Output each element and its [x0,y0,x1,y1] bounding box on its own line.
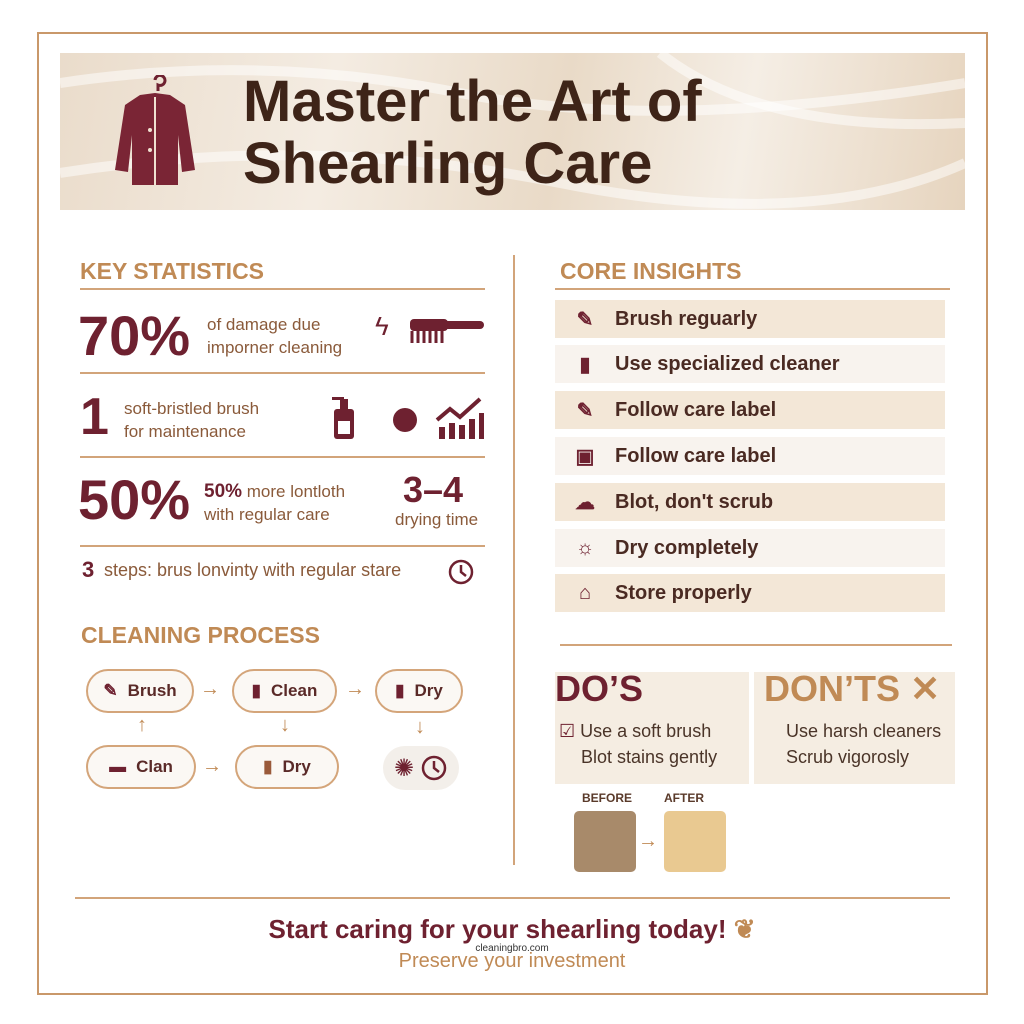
panel: donts [754,672,955,784]
heading: cleaning process: CLEANING PROCESS [81,622,320,648]
panel: donts: Use harsh cleaners [786,721,941,741]
footer: cleaningbro.com [475,943,549,954]
text: Follow care label [615,444,776,466]
footer [268,914,756,972]
panel: dos: ☑ Use a soft brush [559,721,711,741]
flowchart: cleaning process: Dry [282,757,311,776]
stat 50%: 3–4 [403,469,463,510]
text: ⌂ [579,582,591,604]
panel: dos [555,672,749,784]
text: ▣ [576,446,594,468]
text: Dry completely [615,536,758,558]
panel: key statistics [78,258,485,584]
flowchart: cleaning process: Dry [414,681,443,700]
stat 70%: of damage due [207,315,320,334]
stat 1 brush: soft-bristled brush [124,399,259,418]
stat 3 steps: steps: brus lonvinty with regular stare [104,560,401,580]
panel: dos: DO’S [555,668,643,709]
footer: Start caring for your shearling today! ❦ [268,914,756,944]
insight rows: Brush reguarly [615,308,757,330]
flowchart: cleaning process: Clean [271,681,317,700]
text: ▮ [579,354,590,376]
text: Store properly [615,582,752,604]
text: Blot, don't scrub [615,490,773,512]
flowchart: cleaning process: → [345,678,365,700]
before/after: AFTER [664,791,704,805]
flowchart: cleaning process [86,669,463,790]
stat 70%: 70% [78,304,190,367]
before/after: BEFORE [582,791,632,805]
flowchart: cleaning process: ↑ [137,714,147,736]
stat 1 brush [80,388,484,446]
stat 70%: imporner cleaning [207,338,342,357]
title: Master the Art of [243,69,702,134]
flowchart: cleaning process: ↓ [280,714,290,736]
stat 50%: 50% [78,468,190,531]
before/after [574,791,726,872]
stat 70%: ϟ [375,311,389,341]
stat 70% [78,304,484,367]
flowchart: cleaning process: Clan [136,757,173,776]
flowchart: cleaning process: ▮ [252,681,261,700]
panel: donts: DON’TS ✕ [764,668,940,709]
stat 1 brush: 1 [80,388,109,446]
stat 50%: drying time [395,510,478,529]
divider [513,255,515,865]
title: Shearling Care [243,131,652,196]
panel: core insights: CORE INSIGHTS [560,258,741,284]
flowchart: cleaning process: ✺ [394,754,414,782]
stat 50%: 50% more lontloth [204,481,345,502]
stat 1 brush: for maintenance [124,422,246,441]
flowchart: cleaning process: ▮ [263,757,272,776]
text: ☁ [575,492,595,514]
stat 50% [78,468,478,531]
text: Use specialized cleaner [615,352,840,374]
before/after: → [638,830,658,852]
insight rows: ✎ [577,308,593,330]
text: Follow care label [615,398,776,420]
insight rows [555,300,945,338]
panel: dos: Blot stains gently [581,747,717,767]
flowchart: cleaning process: ✎ [103,681,118,700]
header banner [60,53,965,210]
flowchart: cleaning process: ↓ [415,716,425,738]
footer: Preserve your investment [399,950,625,972]
flowchart: cleaning process: → [202,755,222,777]
panel: donts: Scrub vigorosly [786,747,909,767]
flowchart: cleaning process: → [200,678,220,700]
icon: coat [115,75,195,185]
stat 50%: with regular care [204,505,330,524]
flowchart: cleaning process: Brush [128,681,177,700]
stat 3 steps: 3 [82,557,94,582]
text: ☼ [576,536,594,558]
text: ✎ [577,400,593,422]
panel: key statistics: KEY STATISTICS [80,258,264,284]
flowchart: cleaning process: ▮ [395,681,404,700]
title [243,69,702,196]
stat 3 steps [82,557,474,584]
flowchart: cleaning process: ▬ [109,757,126,776]
